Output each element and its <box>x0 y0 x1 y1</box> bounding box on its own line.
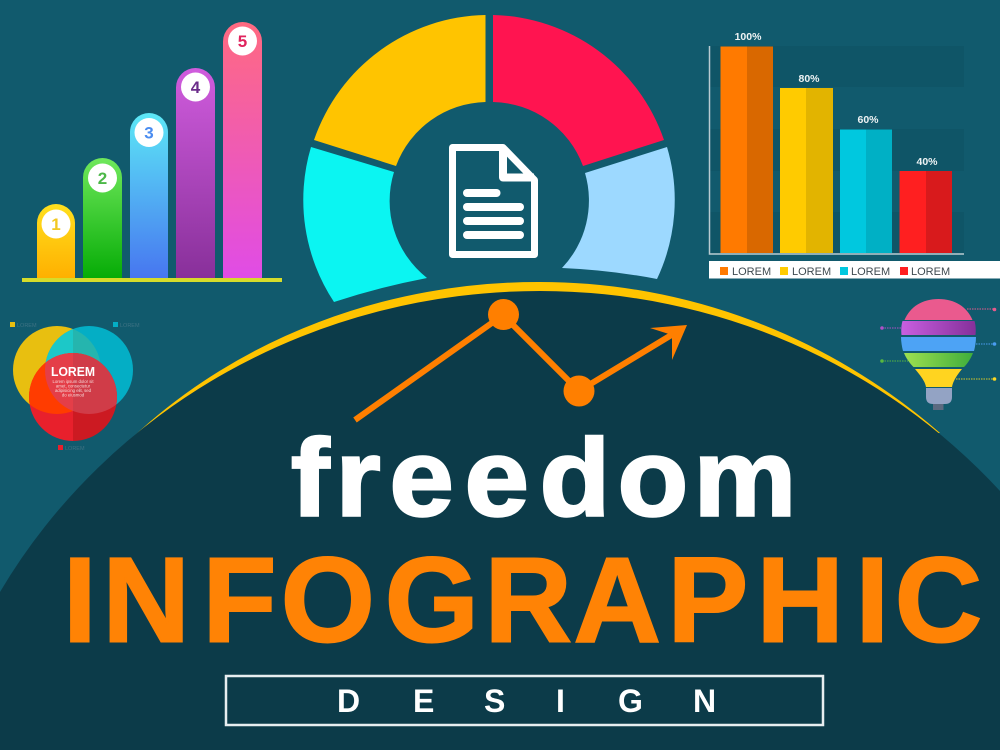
venn body text: adipisicing elit, sed <box>55 388 92 393</box>
dark dome <box>0 291 1000 750</box>
axes <box>710 46 964 254</box>
bulb leader dots <box>880 308 996 381</box>
legend: LOREM <box>732 266 771 278</box>
circle: yellow <box>13 326 101 414</box>
icon: document <box>452 148 534 254</box>
rounded bar chart <box>22 22 282 282</box>
percentage bar chart <box>709 31 1000 278</box>
bar 4: 4 <box>191 78 201 97</box>
chart baseline <box>22 278 282 282</box>
bar 5 <box>223 22 262 278</box>
legend: LOREM <box>792 266 831 278</box>
venn legend: yellow: LOREM <box>17 323 37 329</box>
bulb stripes <box>904 299 972 320</box>
bar: 80% <box>780 73 833 253</box>
heading: INFOGRAPHIC: INFOGRAPHIC <box>63 532 982 668</box>
bar: 60%: 60% <box>857 114 879 126</box>
circle: red <box>29 353 117 441</box>
segment: yellow <box>314 15 486 166</box>
venn heading: LOREM <box>51 364 95 379</box>
bar 4 <box>176 68 215 278</box>
bar 1 <box>37 204 75 278</box>
bar 3: 3 <box>144 124 154 142</box>
legend: LOREM <box>851 266 890 278</box>
bar: 100% <box>720 31 773 253</box>
legend <box>709 261 1000 278</box>
overlap: red and yellow <box>29 353 100 414</box>
bar: 40%: 40% <box>916 156 938 168</box>
heading: DESIGN: DESIGN <box>337 683 716 719</box>
venn body text: Lorem ipsum dolor sit <box>52 379 94 384</box>
segment: red <box>493 15 664 166</box>
bar 5: 5 <box>238 32 247 51</box>
bar 3 <box>130 113 168 278</box>
overlap: red and cyan <box>45 353 117 414</box>
venn body text: amet, consectetur <box>56 384 91 388</box>
segment: cyan <box>303 147 427 302</box>
design box <box>226 676 823 725</box>
overlap: yellow and cyan <box>46 329 100 362</box>
venn legend: red: LOREM <box>65 446 85 452</box>
bar 1: 1 <box>51 215 61 234</box>
chart bands <box>710 46 964 253</box>
gold arc <box>133 282 940 437</box>
bar 2 <box>83 158 122 278</box>
trend arrow <box>355 299 687 420</box>
venn body text: do eiusmod <box>62 392 85 398</box>
segment: light blue <box>562 147 675 279</box>
bar: 60% <box>840 114 892 253</box>
heading: freedom: freedom <box>291 416 796 539</box>
venn legend: cyan: LOREM <box>120 323 140 329</box>
legend: LOREM <box>911 266 950 278</box>
circle: cyan <box>45 326 133 414</box>
bar 2: 2 <box>98 169 107 188</box>
icon: light bulb <box>880 299 996 410</box>
venn diagram <box>10 320 143 452</box>
bar: 80%: 80% <box>798 73 820 85</box>
bulb leader lines <box>882 309 994 379</box>
bar: 40% <box>900 156 952 253</box>
donut chart <box>303 15 675 302</box>
bar: 100%: 100% <box>735 31 762 43</box>
